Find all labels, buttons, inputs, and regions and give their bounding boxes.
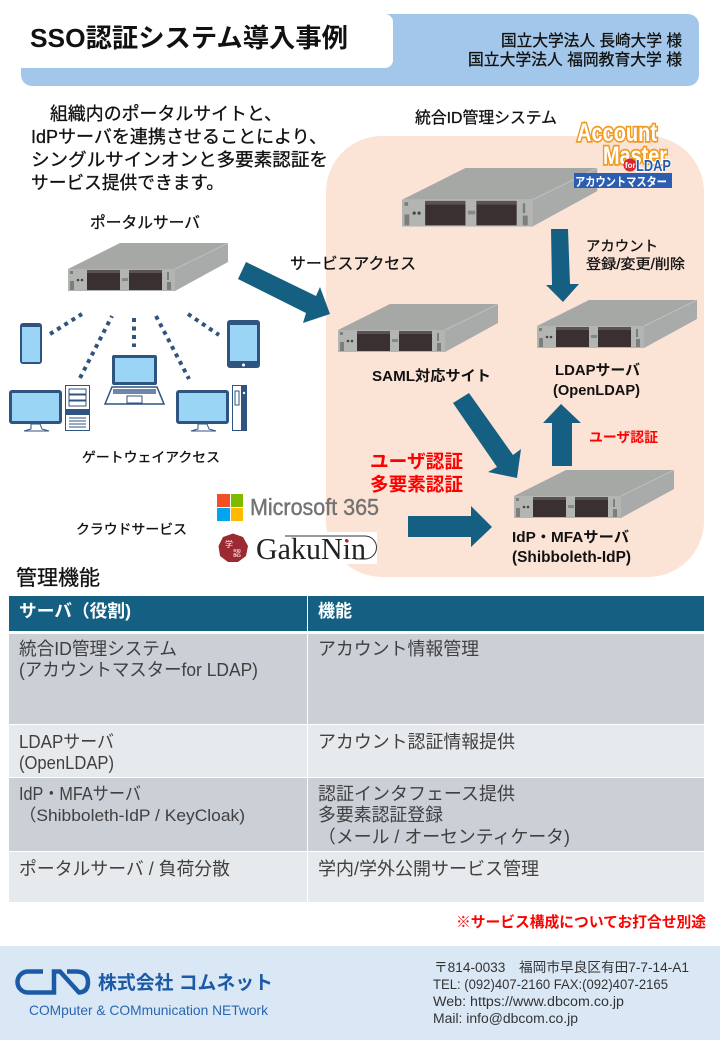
label: account operations: 登録/変更/削除 xyxy=(586,256,685,273)
label: cloud services: クラウドサービス xyxy=(76,522,187,537)
icon: laptop xyxy=(105,355,164,404)
logo: Microsoft 365: Microsoft 365 xyxy=(250,494,379,520)
customer names: 国立大学法人 長崎大学 様 xyxy=(501,32,682,50)
logo: Account Master: LDAP xyxy=(636,158,671,175)
label: portal server: ポータルサーバ xyxy=(90,214,200,232)
label: user auth and mfa: 多要素認証 xyxy=(370,474,463,495)
table: management functions xyxy=(9,596,704,902)
row: idp: IdP・MFAサーバ xyxy=(19,784,141,804)
footer xyxy=(0,946,720,1040)
arrow: idp to ldap xyxy=(543,404,581,466)
customer names xyxy=(468,32,682,69)
intro text: サービス提供できます。 xyxy=(31,173,224,193)
logo: company xyxy=(18,972,273,1018)
logo: Account Master: アカウントマスター xyxy=(575,175,667,189)
table header xyxy=(9,596,704,631)
row: portal: 学内/学外公開サービス管理 xyxy=(318,859,539,879)
title: SSO認証システム導入事例 xyxy=(30,23,348,53)
logo: Account Master: Master xyxy=(603,142,667,170)
label: service access: サービスアクセス xyxy=(290,255,416,273)
logo: Account Master: for xyxy=(625,161,636,170)
row: ldap: アカウント認証情報提供 xyxy=(318,732,515,752)
row: id management: (アカウントマスターfor LDAP) xyxy=(19,660,258,680)
title box xyxy=(21,14,393,68)
contact details xyxy=(433,960,689,1026)
icon: idp server xyxy=(514,470,674,518)
label: account operations: アカウント xyxy=(586,238,658,255)
icon: saml server xyxy=(338,304,498,352)
row: id management: アカウント情報管理 xyxy=(318,639,479,659)
header band xyxy=(21,14,699,86)
label: idp server: (Shibboleth-IdP) xyxy=(512,549,631,566)
label: idp server xyxy=(512,529,631,566)
intro text xyxy=(31,104,328,193)
note: ※サービス構成についてお打合せ別途 xyxy=(456,913,706,931)
heading: management functions: 管理機能 xyxy=(16,567,100,590)
contact details: Mail: info@dbcom.co.jp xyxy=(433,1011,578,1026)
row: id management: 統合ID管理システム xyxy=(19,639,177,659)
logo: GakuNin: 認 xyxy=(233,549,241,558)
row: idp xyxy=(9,778,704,851)
icon: desktop with tower left xyxy=(9,386,90,431)
logo: company: COMputer & COMmunication NETwork xyxy=(29,1002,269,1018)
table header: サーバ（役割) xyxy=(19,601,131,621)
arrow: cloud to idp xyxy=(408,506,492,547)
row: idp: （メール / オーセンティケータ) xyxy=(318,827,570,847)
icon: portal server xyxy=(68,243,228,291)
row: idp: 認証インタフェース提供 xyxy=(318,784,515,804)
intro text: IdPサーバを連携させることにより、 xyxy=(31,127,327,147)
label: integrated ID system: 統合ID管理システム xyxy=(415,109,557,127)
contact details: TEL: (092)407-2160 FAX:(092)407-2165 xyxy=(433,977,668,992)
arrow: saml to idp xyxy=(453,393,521,478)
label: idp server: IdP・MFAサーバ xyxy=(512,529,629,546)
row: ldap xyxy=(9,725,704,777)
contact details: Web: https://www.dbcom.co.jp xyxy=(433,994,624,1009)
row: portal: ポータルサーバ / 負荷分散 xyxy=(19,859,230,879)
label: ldap server: (OpenLDAP) xyxy=(553,382,640,399)
label: gateway access: ゲートウェイアクセス xyxy=(82,450,220,465)
row: ldap: (OpenLDAP) xyxy=(19,753,114,773)
icon: id management server xyxy=(402,168,597,227)
logo: company: 株式会社 コムネット xyxy=(98,972,273,994)
label: user auth and mfa: ユーザ認証 xyxy=(370,451,463,472)
icon: smartphone xyxy=(20,323,42,364)
arrow: service access xyxy=(238,262,330,323)
table header: 機能 xyxy=(318,601,352,621)
label: ldap server: LDAPサーバ xyxy=(555,362,640,379)
label: account operations xyxy=(586,238,685,273)
panel: integrated system background xyxy=(326,136,704,577)
connection lines xyxy=(50,314,219,379)
arrow: account provisioning xyxy=(546,229,579,302)
icon: desktop with tower right xyxy=(176,386,247,431)
logo: Account Master: Account xyxy=(577,119,658,147)
row: ldap: LDAPサーバ xyxy=(19,732,114,752)
intro text: シングルサインオンと多要素認証を xyxy=(31,150,328,170)
label: user auth and mfa xyxy=(370,451,463,495)
contact details: 〒814-0033 福岡市早良区有田7-7-14-A1 xyxy=(434,960,689,975)
row: idp: 多要素認証登録 xyxy=(318,805,443,825)
intro text: 組織内のポータルサイトと、 xyxy=(50,104,282,124)
icon: ldap server xyxy=(537,300,697,348)
icon: tablet xyxy=(227,320,260,368)
row: id management xyxy=(9,634,704,724)
row: portal xyxy=(9,852,704,902)
logo: GakuNin: GakuNin xyxy=(256,531,366,566)
customer names: 国立大学法人 福岡教育大学 様 xyxy=(468,51,682,69)
label: user auth small: ユーザ認証 xyxy=(589,430,658,445)
row: idp: （Shibboleth-IdP / KeyCloak) xyxy=(19,806,245,825)
logo: GakuNin: 学 xyxy=(225,539,233,549)
label: ldap server xyxy=(553,362,640,399)
logo: Account Master xyxy=(574,119,672,189)
label: saml site: SAML対応サイト xyxy=(372,367,491,385)
